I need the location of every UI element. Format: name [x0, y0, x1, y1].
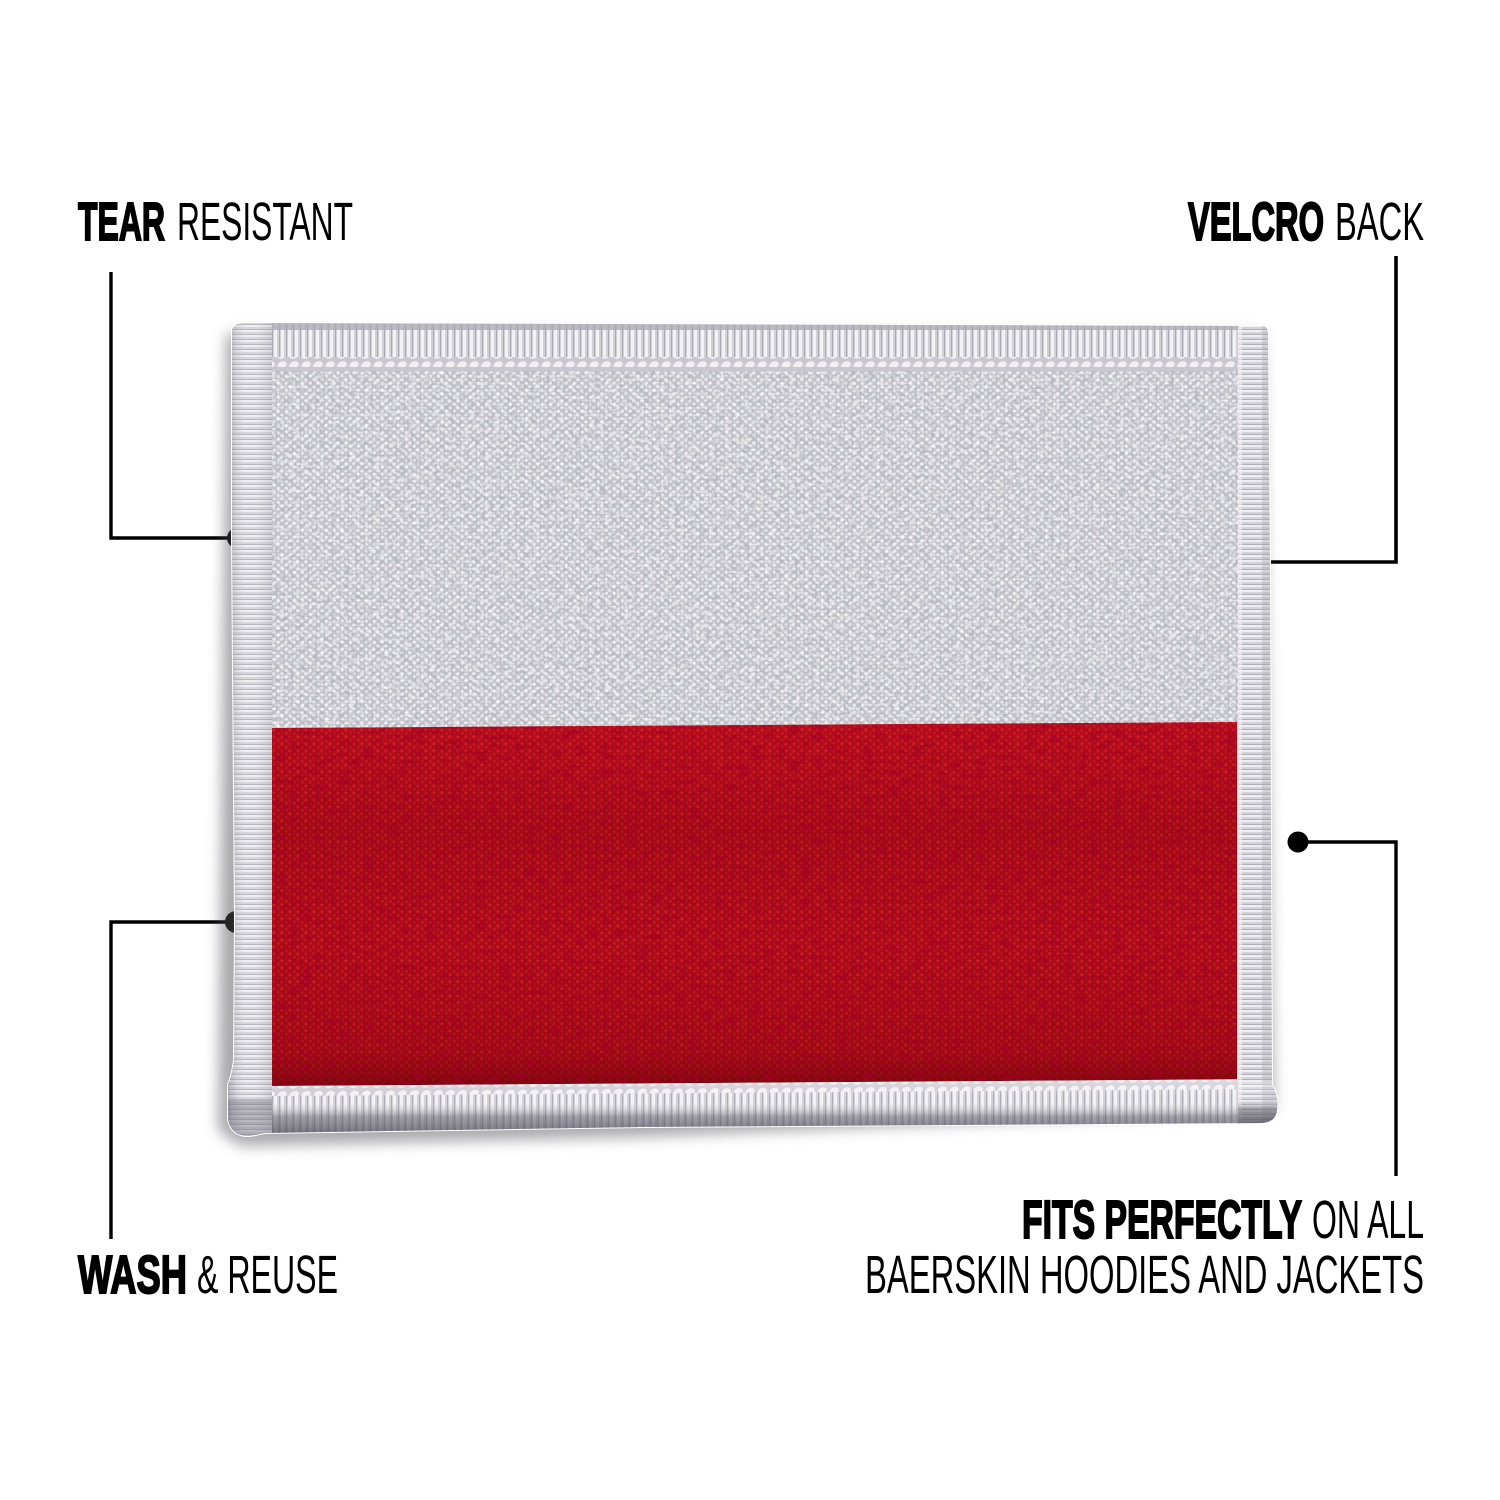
left border: [226, 320, 272, 1140]
callout line: wash and reuse: [111, 911, 247, 1239]
label: wash and reuse: [78, 1245, 338, 1305]
label: fits perfectly: ON ALL: [1312, 1190, 1424, 1250]
top border: [266, 323, 1241, 371]
bottom border: [270, 1079, 1277, 1133]
label: velcro back: VELCRO: [1188, 192, 1324, 252]
patch shadow: [218, 334, 1274, 1146]
callout line: velcro back: [1266, 256, 1396, 562]
label: fits perfectly: FITS PERFECTLY: [1022, 1190, 1302, 1250]
label: tear resistant: TEAR: [78, 192, 165, 252]
patch base: [228, 323, 1277, 1136]
label: wash and reuse: & REUSE: [197, 1245, 338, 1305]
red stripe: [272, 720, 1237, 1090]
right border: [1238, 324, 1280, 1126]
callout line: tear resistant: [111, 272, 247, 548]
label: tear resistant: [78, 192, 353, 252]
label: tear resistant: RESISTANT: [177, 192, 353, 252]
label: velcro back: BACK: [1335, 192, 1424, 252]
patch: Polish flag: [218, 320, 1280, 1146]
label: wash and reuse: WASH: [78, 1245, 187, 1305]
label: fits perfectly: [865, 1190, 1424, 1305]
white stripe: [270, 370, 1240, 732]
callout line: fits perfectly: [1288, 832, 1396, 1176]
